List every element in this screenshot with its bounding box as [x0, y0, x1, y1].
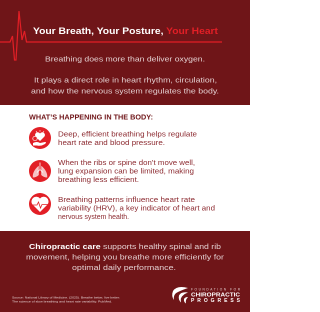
text: item 2	[58, 160, 195, 184]
ECG line	[0, 11, 222, 60]
logo: Foundation for Chiropractic Progress: PROGRESS	[191, 298, 241, 304]
icon: lungs	[29, 160, 51, 182]
intro text: It plays a direct role in heart rhythm, circulation,	[34, 76, 217, 84]
closing statement: movement, helping you breathe more efficiently for	[26, 252, 225, 261]
intro text	[31, 54, 219, 96]
background: top panel	[0, 0, 250, 105]
source citation: The science of slow breathing and heart rate variability. PubMed.	[12, 300, 112, 304]
text: item 3	[58, 197, 215, 221]
text: item 2: When the ribs or spine don’t move well,	[58, 160, 195, 167]
text: item 3: nervous system health.	[58, 214, 129, 221]
source citation	[12, 296, 120, 304]
closing statement: optimal daily performance.	[72, 263, 176, 272]
intro text: and how the nervous system regulates the body.	[31, 86, 219, 96]
text: item 1	[58, 131, 197, 147]
text: item 3: Breathing patterns influence heart rate	[58, 197, 195, 204]
section heading: WHAT’S HAPPENING IN THE BODY:	[29, 114, 153, 122]
text: item 1: heart rate and blood pressure.	[58, 140, 165, 147]
logo: Foundation for Chiropractic Progress: CHIROPRACTIC	[191, 292, 240, 298]
intro text: Breathing does more than deliver oxygen.	[45, 54, 205, 64]
icon: heart and hand	[29, 127, 51, 149]
source citation: Source: National Library of Medicine. (2025). Breathe better, live better:	[12, 296, 120, 300]
background: bottom panel	[0, 231, 250, 312]
text: item 1: Deep, efficient breathing helps regulate	[58, 131, 197, 138]
title: Your Breath, Your Posture, Your Heart	[33, 26, 219, 37]
text: item 2: lung expansion can be limited, making	[58, 168, 194, 175]
closing statement	[26, 242, 225, 272]
text: item 3: variability (HRV), a key indicator of heart and	[58, 205, 215, 212]
icon: heart with pulse	[29, 193, 51, 215]
text: item 2: breathing less efficient.	[58, 177, 139, 184]
logo: Foundation for Chiropractic Progress: FOUNDATION FOR	[191, 288, 241, 292]
closing statement: Chiropractic care supports healthy spinal and rib	[29, 242, 221, 251]
logo: Foundation for Chiropractic Progress	[172, 287, 241, 304]
